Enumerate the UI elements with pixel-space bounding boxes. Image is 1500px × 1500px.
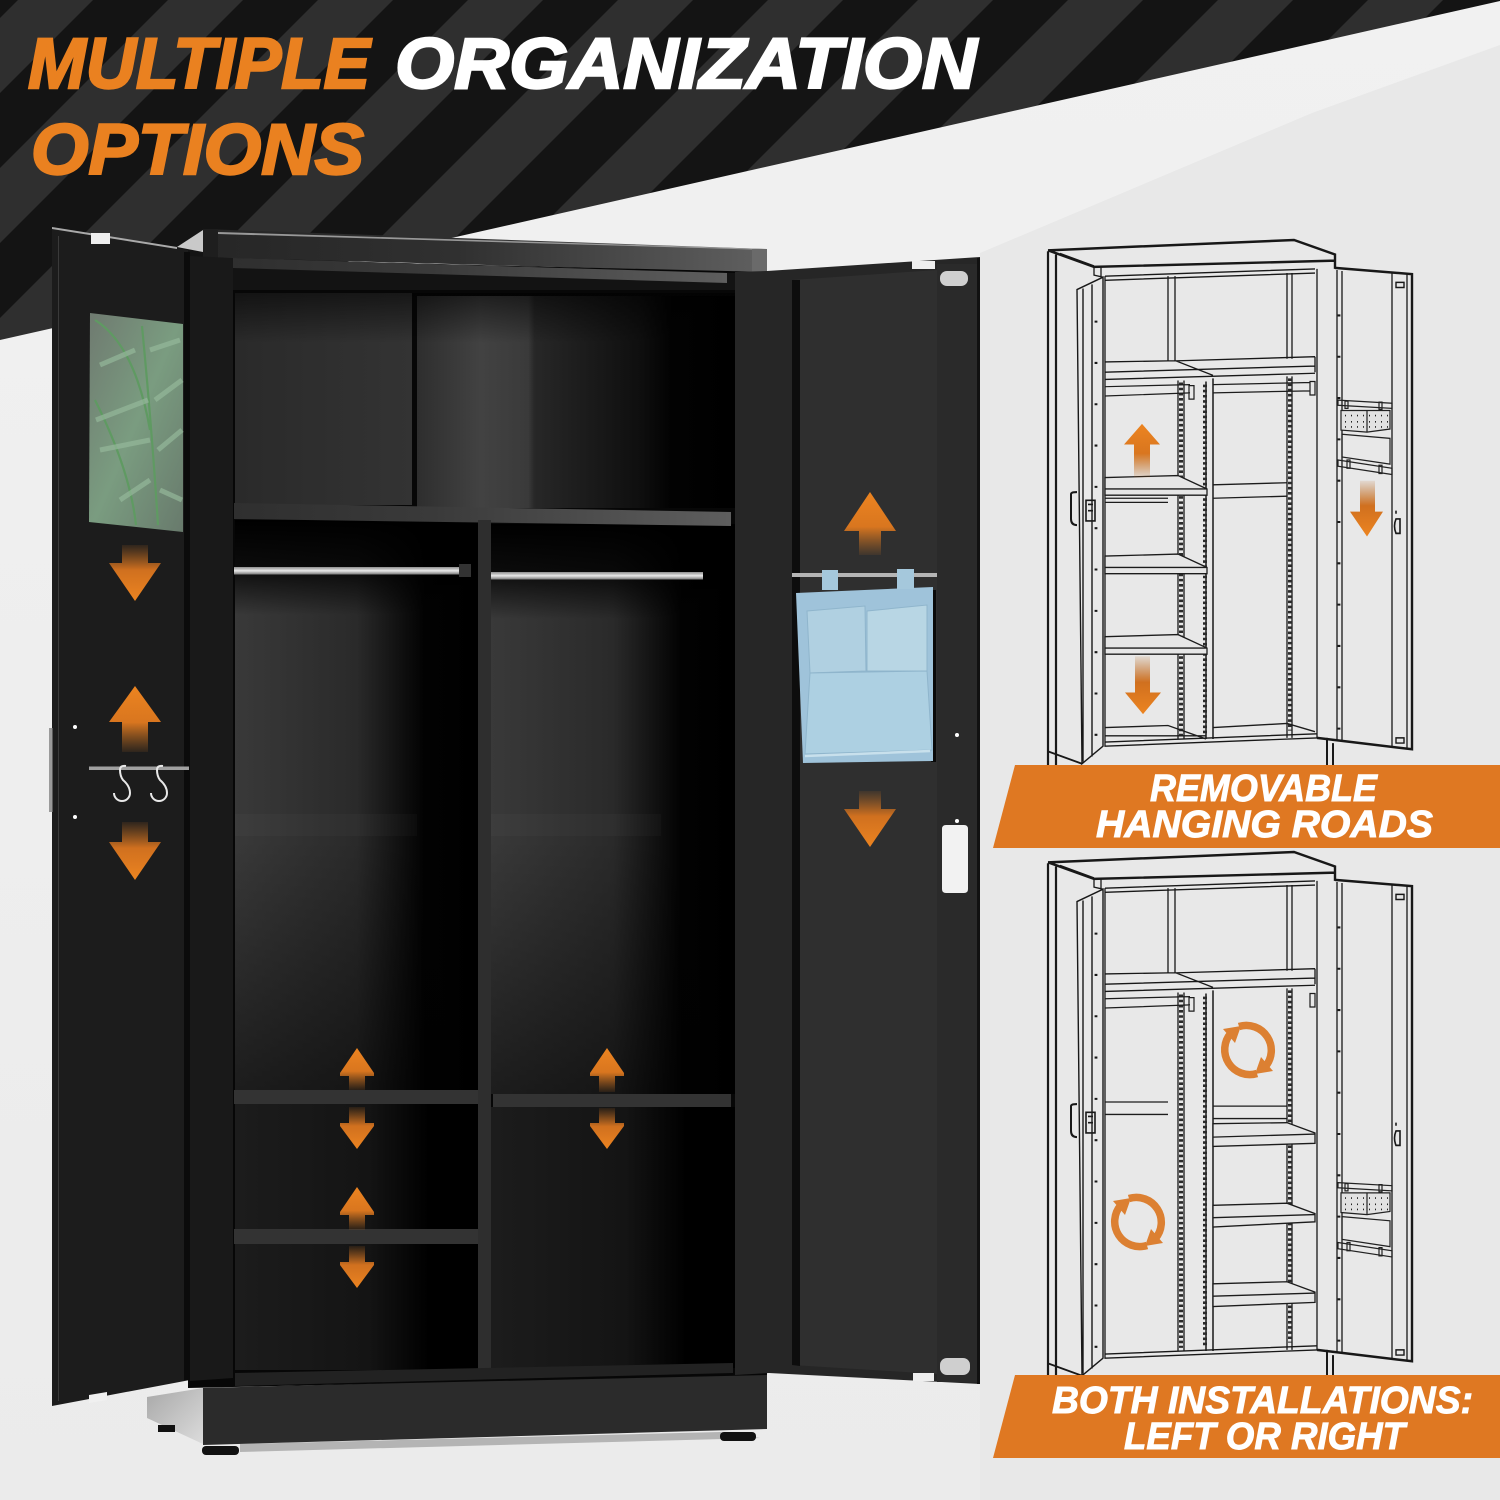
- banner: removable hanging roads: [993, 765, 1500, 848]
- rod: [1105, 994, 1315, 1011]
- shelves: [1105, 476, 1315, 739]
- hanging rod left: [234, 564, 471, 577]
- arrows: right door: [844, 492, 896, 847]
- cabinet interior: [188, 258, 767, 1388]
- bottom sill: [235, 1363, 733, 1386]
- cabinet side and feet: [147, 1388, 756, 1455]
- shelves: [1105, 1102, 1315, 1307]
- left hanging compartment: [235, 520, 478, 1370]
- lower shelves: [234, 1090, 731, 1244]
- lock latch: [942, 825, 968, 893]
- line drawing: both installations: [1048, 852, 1412, 1389]
- rod, shelves and organizer: [1105, 994, 1392, 1307]
- rotate icon upper: [1223, 1025, 1273, 1075]
- floor shadow: [240, 1432, 760, 1452]
- arrow down right: [1350, 481, 1383, 536]
- rotate icon lower: [1113, 1197, 1163, 1247]
- cabinet base: [203, 1373, 767, 1445]
- title: MULTIPLE: [28, 25, 373, 104]
- banner: both installations: LEFT OR RIGHT: [1124, 1416, 1408, 1458]
- pocket organizer: [1338, 1183, 1392, 1257]
- inner top strip and shadow: [233, 258, 735, 290]
- right door and frame: [735, 257, 980, 1384]
- left front frame: [190, 256, 233, 1381]
- title: OPTIONS: [31, 111, 364, 190]
- arrows: right lower shelf: [590, 1048, 624, 1149]
- arrow up: [1124, 424, 1160, 478]
- hanging rod right: [491, 572, 703, 580]
- rods, shelves, organizer and arrows: [1105, 382, 1392, 739]
- hook rail with S-hooks: [89, 766, 189, 801]
- arrows: left door: [109, 545, 161, 880]
- mirror with plant reflection: [89, 313, 183, 532]
- banner: removable hanging roads: REMOVABLE: [1150, 768, 1379, 810]
- arrows: left lower shelves: [340, 1048, 374, 1288]
- cabinet top cap: [177, 229, 767, 273]
- banner: removable hanging roads: HANGING ROADS: [1096, 804, 1433, 846]
- door rail with hanging bag: [792, 569, 937, 763]
- upper compartment back panels: [235, 293, 735, 508]
- left door: [49, 227, 190, 1406]
- centre divider: [478, 520, 491, 1370]
- main cabinet photo: [49, 227, 980, 1455]
- banner: both installations: [993, 1375, 1500, 1458]
- rods: [1105, 382, 1315, 399]
- header band with diagonal stripes: [0, 0, 1500, 340]
- title: [28, 25, 979, 190]
- top shelf: [234, 503, 731, 526]
- line drawing: removable hanging rods: [1048, 240, 1412, 777]
- arrow down left: [1125, 656, 1161, 714]
- title: ORGANIZATION: [395, 25, 979, 104]
- banner: both installations: BOTH INSTALLATIONS:: [1052, 1380, 1473, 1422]
- pocket organizer: [1338, 400, 1392, 474]
- right hanging compartment: [491, 524, 735, 1368]
